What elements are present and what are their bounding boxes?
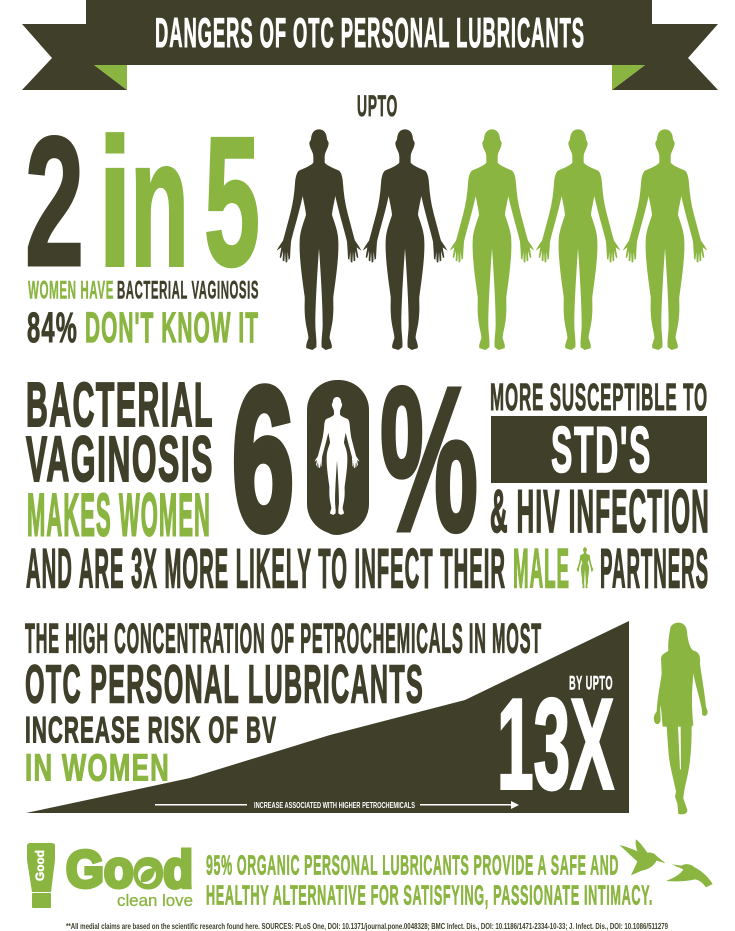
petrochemicals text: [25, 614, 542, 790]
text: MAKES WOMEN: [27, 482, 211, 548]
by upto 13x: [497, 672, 614, 816]
three times more likely line: MALE: [513, 536, 570, 600]
big stat: 2 in 5: i: [98, 100, 132, 304]
text: DON'T KNOW IT: [85, 304, 259, 352]
icon: product tube: Good: [33, 850, 47, 881]
organic alternative statement: [206, 850, 653, 910]
big stat: 2 in 5: 2: [25, 98, 84, 304]
std box: [491, 413, 707, 486]
text: UPTO: [357, 90, 398, 123]
petrochemicals text: IN WOMEN: [25, 748, 170, 790]
figure 1 dark: [277, 129, 361, 350]
icon: leaf: [138, 866, 156, 884]
increase arrow: [155, 801, 519, 810]
bacterial vaginosis makes women: [26, 371, 214, 548]
logo: good clean love: Good: [66, 841, 193, 899]
figure 3 green: [450, 129, 534, 350]
text: BACTERIAL VAGINOSIS: [117, 276, 259, 304]
zero with solid fill: [307, 380, 369, 534]
increase arrow: INCREASE ASSOCIATED WITH HIGHER PETROCHEMICALS: [254, 801, 415, 810]
big stat: 60%: [232, 345, 478, 574]
icon: white woman in zero: [314, 397, 360, 515]
icon: hummingbird two: [666, 864, 713, 887]
women have bacterial vaginosis: WOMEN HAVE: [28, 276, 114, 304]
figure 5 green: [623, 129, 707, 350]
icon: walking woman: [654, 623, 708, 814]
big stat: 60%: 0: [306, 346, 368, 573]
title banner: [22, 0, 718, 90]
figure 2 dark: [363, 129, 447, 350]
banner main: [86, 0, 652, 65]
petrochemicals text: INCREASE RISK OF BV: [25, 710, 277, 750]
big stat: 2 in 5: [25, 98, 260, 304]
icon: product tube: [27, 843, 55, 908]
icon: hummingbird one: [619, 839, 666, 875]
figure 4 green: [536, 129, 620, 350]
84% don't know it: [27, 304, 259, 352]
banner fold left: [94, 65, 127, 90]
logo: good clean love: clean love: [117, 891, 193, 910]
icon: male figure: [576, 547, 594, 588]
big stat: 2 in 5: 5: [204, 98, 260, 304]
banner fold right: [612, 65, 645, 90]
84% don't know it: 84%: [27, 304, 78, 352]
banner left tail: [22, 24, 127, 90]
text: VAGINOSIS: [26, 423, 214, 495]
big stat: 60%: %: [380, 345, 478, 574]
text: BACTERIAL: [26, 371, 214, 440]
big stat: 2 in 5: n: [130, 100, 189, 304]
five women figures: [277, 129, 707, 350]
banner right tail: [612, 24, 718, 90]
rising wedge chart: [26, 621, 629, 813]
big stat: 60%: 6: [232, 346, 294, 573]
text: BY UPTO: [569, 674, 613, 694]
by upto 13x: 13X: [497, 672, 614, 816]
